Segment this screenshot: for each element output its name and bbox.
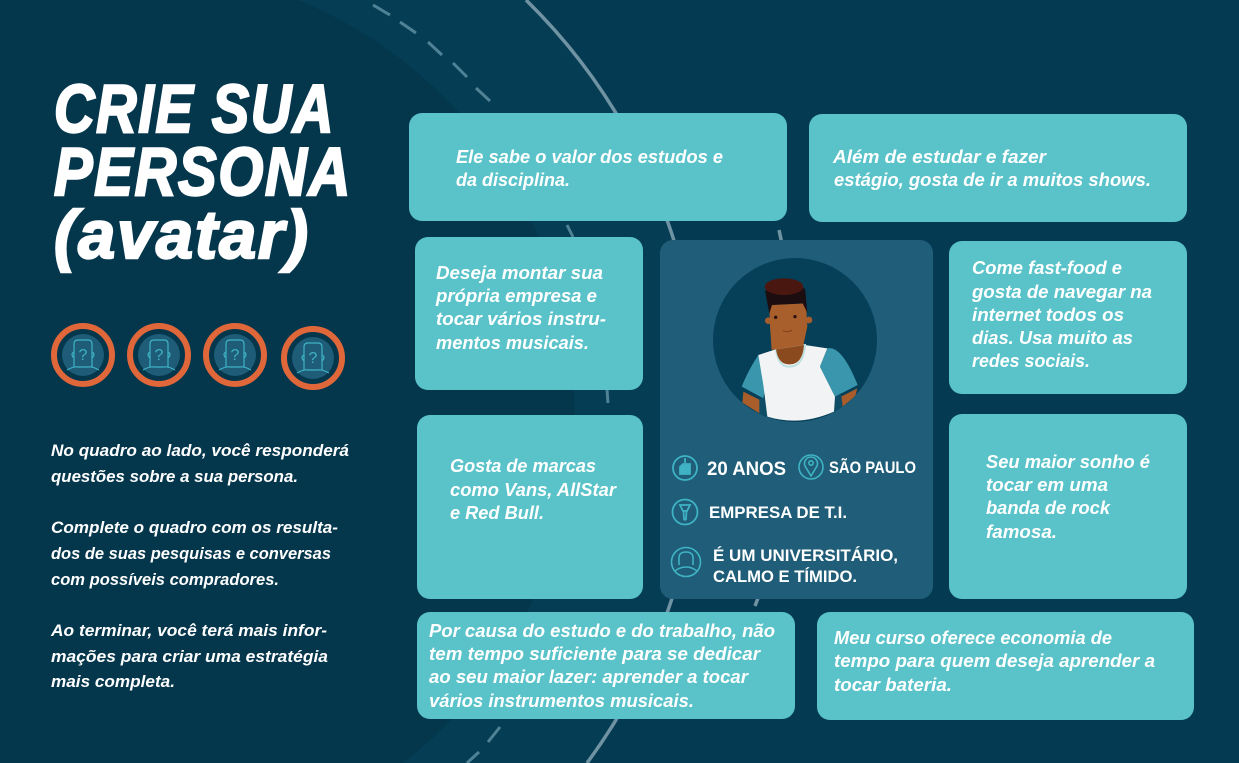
icon: tie [672,500,698,524]
panel: brands [417,415,643,599]
icon: unknown persona 4 [284,329,342,387]
location label: SÃO PAULO [829,457,916,477]
intro text: No quadro ao lado, você responderá [51,442,349,460]
icon: person [672,548,700,576]
intro text: mais completa. [51,673,175,691]
panel: habits: Come fast-food e [972,258,1122,278]
icon: age [673,456,697,480]
panel: habits: gosta de navegar na [971,282,1152,302]
intro text: com possíveis compradores. [51,571,279,589]
persona icons row [54,326,342,387]
icon: unknown persona 2: ? [155,347,164,364]
panel: dream: Seu maior sonho é [986,452,1150,472]
panel: habits [949,241,1187,394]
panel: habits: dias. Usa muito as [972,328,1133,348]
panel: solution: tocar bateria. [834,675,952,695]
personality label: CALMO E TÍMIDO. [713,567,857,586]
intro text: Complete o quadro com os resulta- [51,519,339,537]
panel: solution [817,612,1194,720]
panel: interests [809,114,1187,222]
icon: unknown persona 1: ? [79,347,88,364]
icon: location pin [799,455,823,479]
personality label: É UM UNIVERSITÁRIO, [713,546,898,565]
road curve [0,0,782,763]
title: CRIE SUA [54,71,335,147]
panel: values: da disciplina. [456,170,570,190]
panel: solution: tempo para quem deseja aprender a [834,651,1155,671]
icon: unknown persona 3: ? [231,347,240,364]
intro text: mações para criar uma estratégia [51,648,328,666]
avatar illustration [713,258,877,422]
panel: goals: mentos musicais. [436,333,589,353]
intro text: Ao terminar, você terá mais infor- [50,622,328,640]
panel: problem [417,612,795,719]
panel: interests: Além de estudar e fazer [832,147,1047,167]
icon: unknown persona 4: ? [309,350,318,367]
panel: persona card [660,240,933,599]
panel: brands: como Vans, AllStar [450,480,617,500]
panel: values: Ele sabe o valor dos estudos e [456,147,723,167]
panel: problem: ao seu maior lazer: aprender a tocar [429,667,749,687]
panel: brands: e Red Bull. [450,503,544,523]
panel: goals: própria empresa e [435,286,597,306]
panel: goals [415,237,643,390]
intro text: questões sobre a sua persona. [51,468,298,486]
title: PERSONA [54,134,352,210]
panel: problem: Por causa do estudo e do trabalho, não [429,621,775,641]
icon: unknown persona 1 [54,326,112,384]
icon: unknown persona 3 [206,326,264,384]
panel: interests: estágio, gosta de ir a muitos shows. [834,170,1151,190]
panel: brands: Gosta de marcas [450,456,596,476]
personality label [713,546,898,586]
age label: 20 ANOS [707,459,786,480]
panel: goals: tocar vários instru- [436,309,606,329]
panel: problem: vários instrumentos musicais. [429,691,694,711]
panel: habits: internet todos os [972,305,1124,325]
panel: dream: tocar em uma [986,475,1108,495]
panel: habits: redes sociais. [972,351,1090,371]
panel: solution: Meu curso oferece economia de [834,628,1112,648]
panel: dream [949,414,1187,599]
panel: problem: tem tempo suficiente para se dedicar [429,644,761,664]
panel: goals: Deseja montar sua [436,263,603,283]
panel: values [409,113,787,221]
intro text [50,442,349,691]
panel: dream: banda de rock [986,498,1111,518]
work label: EMPRESA DE T.I. [709,503,847,522]
icon: unknown persona 2 [130,326,188,384]
title: (avatar) [54,197,310,273]
title [54,71,352,273]
intro text: dos de suas pesquisas e conversas [51,545,331,563]
panel: dream: famosa. [986,522,1057,542]
